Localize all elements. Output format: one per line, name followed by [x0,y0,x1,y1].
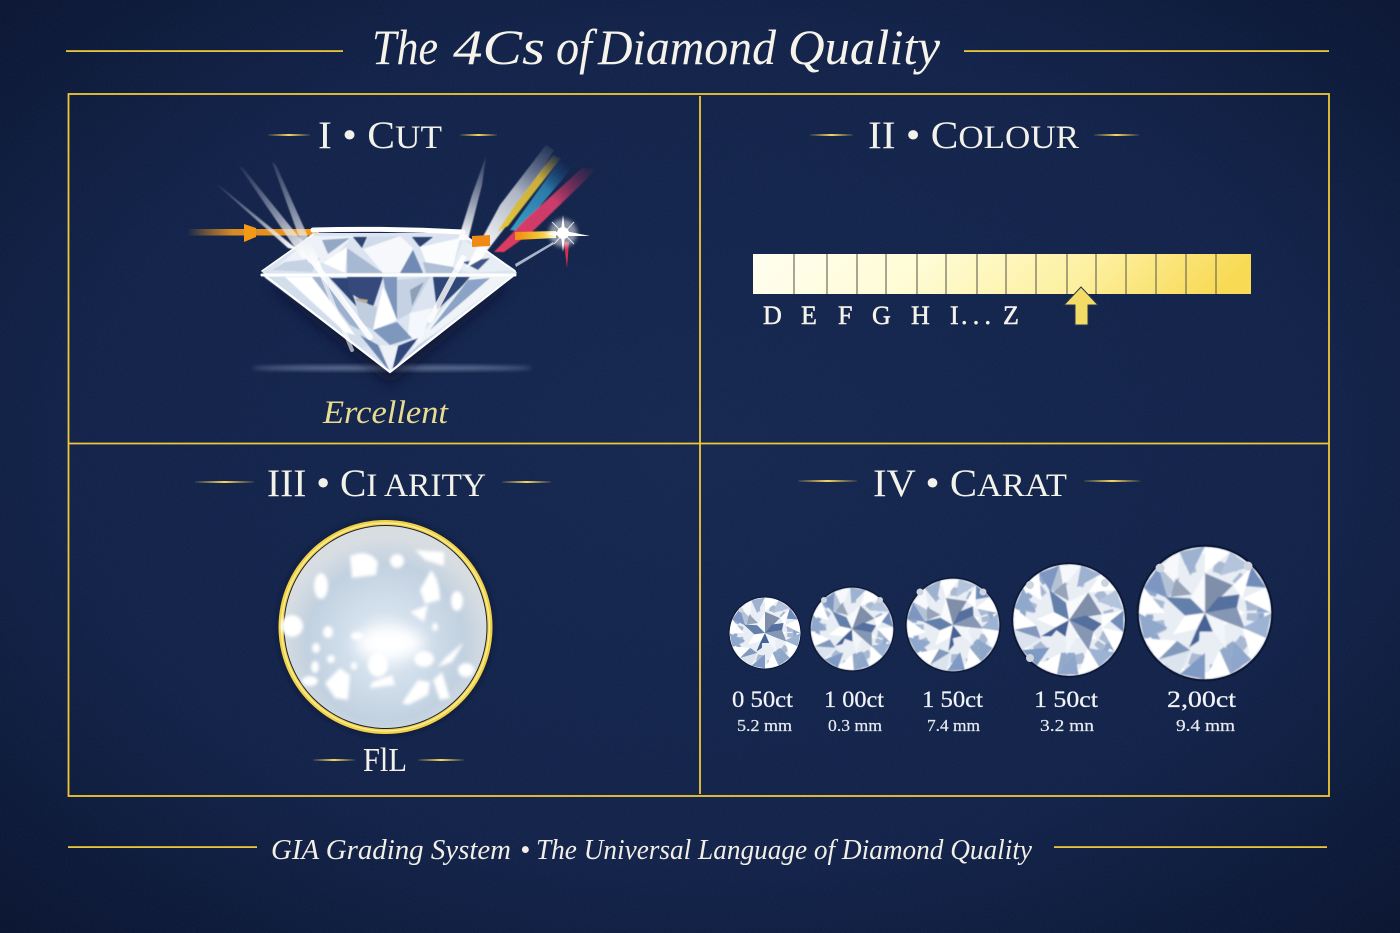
grade letters: E [801,301,817,330]
diamond shadow [270,285,510,385]
footer: The Universal Language of Diamond Quality [536,834,1032,866]
colour heading: II • COLOUR [868,114,1079,157]
diamond 1.50 ct [894,566,1012,735]
title [66,19,1329,75]
light beam right [472,231,569,268]
cut heading: I • CUT [318,114,442,157]
clarity heading: III • CI ARITY [267,462,486,505]
diamond illustration [262,229,517,373]
carat heading: IV • CARAT [873,462,1067,505]
diamond 0.50 ct [728,596,802,735]
grade letters: ... [961,301,991,330]
grade letters: D [763,301,782,330]
grade letters: G [872,301,891,330]
grid frame [68,94,1329,796]
title: 4Cs [453,19,545,75]
diamond 1.50 ct: 7.4 mm [927,716,980,735]
diamond 2.00 ct: 2,00ct [1167,687,1237,712]
diamond 0.50 ct: 5.2 mm [737,716,792,735]
colour scale [753,254,1251,294]
icon: arrow marker [1064,287,1098,325]
grade letters [763,301,1019,330]
diamond 2.00 ct: 9.4 mm [1176,716,1235,735]
cut grade: Ercellent [322,395,449,431]
title: Quality [788,19,941,75]
footer [68,834,1327,866]
diamond 0.50 ct: 0 50ct [732,687,794,712]
diamond 2.00 ct [1137,545,1273,735]
diamond 1.50 ct: 1 50ct [922,687,984,712]
clarity loupe [276,518,494,736]
diamond 1.00 ct [797,574,907,735]
diamond 1.00 ct: 1 00ct [824,687,885,712]
title: The [372,19,438,75]
panel: carat [728,462,1273,735]
title: of [556,19,598,75]
grade letters: F [838,301,852,330]
floor glow [252,366,532,370]
panel: colour [753,114,1251,330]
title: Diamond [597,19,777,75]
panel: cut [187,114,598,431]
clarity grade: FlL [363,742,407,779]
diamond 1.50 ct large: 1 50ct [1034,687,1099,712]
grade letters: H [911,301,930,330]
sparkle [546,215,590,252]
grade letters: I [950,301,959,330]
diamond 1.50 ct large: 3.2 mn [1040,716,1095,735]
diamond 1.50 ct large [989,540,1149,735]
refracted light rays [217,145,598,268]
panel: clarity [195,462,551,779]
grade letters: Z [1003,301,1019,330]
light beam left [187,224,319,242]
facet highlights [262,229,515,372]
footer: GIA Grading System [271,834,511,866]
diamond 1.00 ct: 0.3 mm [828,716,882,735]
footer: • [520,834,530,866]
